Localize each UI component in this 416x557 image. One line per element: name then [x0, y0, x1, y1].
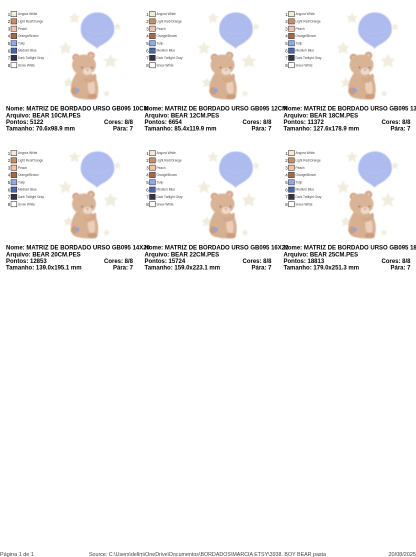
design details text	[284, 106, 416, 132]
design details text: Cores: 8/8	[104, 120, 134, 126]
color legend: 1	[146, 12, 149, 17]
color legend: Dark Twilight Gray	[156, 56, 183, 60]
color legend: Angora White	[18, 151, 38, 155]
color legend: 5	[146, 41, 149, 46]
design details text: Nome: MATRIZ DE BORDADO URSO GB095 16X22	[144, 246, 289, 252]
color legend: 2	[285, 158, 288, 163]
design details text: Pára: 7	[390, 126, 411, 132]
panel: design BEAR 22CM	[144, 150, 289, 272]
color legend: 2	[8, 158, 11, 163]
color legend: 8	[146, 202, 149, 207]
color legend: Snow White	[156, 63, 174, 67]
design details text: Arquivo: BEAR 18CM.PES	[284, 113, 358, 119]
color legend: Snow White	[296, 202, 313, 206]
color legend: 7	[285, 195, 288, 200]
color legend: Medium Blue	[296, 188, 314, 192]
color legend	[8, 150, 44, 207]
color legend	[146, 12, 183, 68]
icon: bear with balloon and stars	[336, 12, 399, 99]
color legend: 3	[146, 26, 149, 31]
panel: design BEAR 12CM	[144, 12, 287, 132]
color legend: Angora White	[156, 151, 176, 155]
color legend: 5	[8, 180, 11, 185]
icon: bear with balloon and stars	[197, 151, 260, 238]
icon: bear with balloon and stars	[336, 151, 399, 238]
design details text	[284, 246, 416, 272]
design details text: Tamanho: 159.0x223.1 mm	[144, 266, 220, 272]
color legend	[285, 12, 322, 68]
color legend: Orange/Brown	[296, 34, 316, 38]
color legend: 8	[8, 202, 11, 207]
design details text: Cores: 8/8	[242, 259, 272, 265]
design details text: Nome: MATRIZ DE BORDADO URSO GB095 10CM	[6, 106, 149, 112]
color legend: 4	[146, 173, 149, 178]
design details text: Tamanho: 139.0x195.1 mm	[6, 266, 82, 272]
color legend: 6	[146, 48, 149, 53]
color legend: Angora White	[156, 12, 176, 16]
design details text: Tamanho: 70.6x98.9 mm	[6, 126, 75, 132]
design details text: Pára: 7	[251, 266, 272, 272]
color legend: 4	[285, 34, 288, 39]
design details text: Nome: MATRIZ DE BORDADO URSO GB095 14X20	[6, 246, 151, 252]
color legend: 8	[285, 202, 288, 207]
color legend: Angora White	[296, 12, 315, 16]
icon: bear with balloon and stars	[197, 12, 260, 99]
color legend: Peach	[296, 27, 305, 31]
color legend: 3	[8, 165, 11, 170]
color legend: 6	[146, 187, 149, 192]
color legend: 8	[146, 63, 149, 68]
design details text: Tamanho: 85.4x119.9 mm	[144, 126, 216, 132]
design details text	[144, 106, 287, 132]
color legend: Medium Blue	[156, 49, 175, 53]
color legend: Snow White	[18, 63, 35, 67]
color legend: Light Red/Orange	[296, 158, 321, 162]
design details text: Arquivo: BEAR 20CM.PES	[6, 252, 81, 258]
color legend: Medium Blue	[18, 188, 37, 192]
color legend: Orange/Brown	[156, 34, 177, 38]
design details text: Pontos: 18813	[284, 259, 325, 265]
color legend: Peach	[156, 166, 166, 170]
color legend: 4	[285, 173, 288, 178]
color legend: 4	[8, 34, 11, 39]
design details text: Pára: 7	[390, 266, 411, 272]
color legend: Dark Twilight Gray	[18, 195, 44, 199]
color legend: Orange/Brown	[296, 173, 316, 177]
color legend: Dark Twilight Gray	[296, 195, 322, 199]
design details text	[144, 246, 289, 272]
color legend: 1	[285, 12, 288, 17]
design details text: Pontos: 15724	[144, 259, 186, 265]
color legend: 3	[8, 26, 11, 31]
color legend: 2	[146, 158, 149, 163]
color legend: 2	[8, 19, 11, 24]
color legend: Peach	[296, 166, 305, 170]
color legend: Tulip	[296, 180, 303, 184]
color legend: 7	[285, 56, 288, 61]
color legend	[285, 150, 322, 207]
design details text: Tamanho: 179.0x251.3 mm	[284, 266, 359, 272]
color legend: Tulip	[18, 180, 25, 184]
panel: design BEAR 10CM	[6, 12, 149, 132]
color legend: Orange/Brown	[18, 173, 39, 177]
color legend: 7	[146, 56, 149, 61]
color legend: Angora White	[296, 151, 315, 155]
color legend: 8	[8, 63, 11, 68]
color legend	[8, 12, 44, 68]
design details text: Nome: MATRIZ DE BORDADO URSO GB095 12CM	[144, 106, 287, 112]
design details text: Pontos: 11372	[284, 120, 325, 126]
color legend: Peach	[18, 27, 27, 31]
color legend: 5	[8, 41, 11, 46]
color legend: Angora White	[18, 12, 38, 16]
color legend: 3	[285, 165, 288, 170]
color legend: 3	[146, 165, 149, 170]
color legend: 2	[285, 19, 288, 24]
design details text: Pontos: 5122	[6, 120, 44, 126]
color legend: 7	[8, 195, 11, 200]
design details text: Arquivo: BEAR 10CM.PES	[6, 113, 81, 119]
design details text: Arquivo: BEAR 25CM.PES	[284, 252, 358, 258]
color legend: 4	[146, 34, 149, 39]
color legend: Snow White	[296, 63, 313, 67]
design details text: Pára: 7	[251, 126, 272, 132]
color legend: Light Red/Orange	[296, 20, 321, 24]
design details text: Tamanho: 127.6x178.9 mm	[284, 126, 359, 132]
color legend: Dark Twilight Gray	[156, 195, 183, 199]
color legend: 1	[285, 151, 288, 156]
icon: bear with balloon and stars	[59, 151, 121, 238]
color legend: Medium Blue	[156, 188, 175, 192]
color legend: 7	[8, 56, 11, 61]
color legend: 1	[8, 151, 11, 156]
color legend: 7	[146, 195, 149, 200]
color legend: Orange/Brown	[18, 34, 39, 38]
color legend: 3	[285, 26, 288, 31]
design details text	[6, 246, 151, 272]
color legend: Light Red/Orange	[156, 158, 182, 162]
color legend: Tulip	[296, 41, 303, 45]
panel: design BEAR 18CM	[284, 12, 416, 132]
color legend: Tulip	[156, 41, 164, 45]
panel: design BEAR 25CM	[284, 150, 416, 272]
design details text: Cores: 8/8	[381, 120, 411, 126]
color legend: Orange/Brown	[156, 173, 177, 177]
design details text: Pontos: 12853	[6, 259, 47, 265]
color legend: 8	[285, 63, 288, 68]
panel: design BEAR 20CM	[6, 150, 151, 272]
design details text: Cores: 8/8	[381, 259, 411, 265]
color legend: 1	[146, 151, 149, 156]
design details text: Pontos: 6654	[144, 120, 183, 126]
color legend	[146, 150, 183, 207]
color legend: Snow White	[18, 202, 35, 206]
color legend: 5	[285, 41, 288, 46]
page footer	[0, 552, 416, 557]
color legend: Medium Blue	[296, 49, 314, 53]
color legend: Peach	[18, 166, 27, 170]
design details text: Cores: 8/8	[242, 120, 272, 126]
color legend: Tulip	[156, 180, 164, 184]
design details text	[6, 106, 149, 132]
design details text: Arquivo: BEAR 12CM.PES	[144, 113, 219, 119]
color legend: 6	[285, 48, 288, 53]
color legend: Dark Twilight Gray	[296, 56, 322, 60]
color legend: 6	[285, 187, 288, 192]
design details text: Arquivo: BEAR 22CM.PES	[144, 252, 219, 258]
color legend: 6	[8, 187, 11, 192]
color legend: Light Red/Orange	[156, 20, 182, 24]
color legend: Light Red/Orange	[18, 20, 43, 24]
color legend: Snow White	[156, 202, 174, 206]
color legend: 6	[8, 48, 11, 53]
color legend: Medium Blue	[18, 49, 37, 53]
color legend: Light Red/Orange	[18, 158, 43, 162]
color legend: Peach	[156, 27, 166, 31]
color legend: 5	[146, 180, 149, 185]
color legend: Dark Twilight Gray	[18, 56, 44, 60]
color legend: 2	[146, 19, 149, 24]
color legend: Tulip	[18, 41, 25, 45]
icon: bear with balloon and stars	[59, 12, 121, 99]
design details text: Pára: 7	[113, 126, 134, 132]
color legend: 5	[285, 180, 288, 185]
design details text: Pára: 7	[113, 266, 134, 272]
color legend: 4	[8, 173, 11, 178]
design details text: Cores: 8/8	[104, 259, 134, 265]
color legend: 1	[8, 12, 11, 17]
